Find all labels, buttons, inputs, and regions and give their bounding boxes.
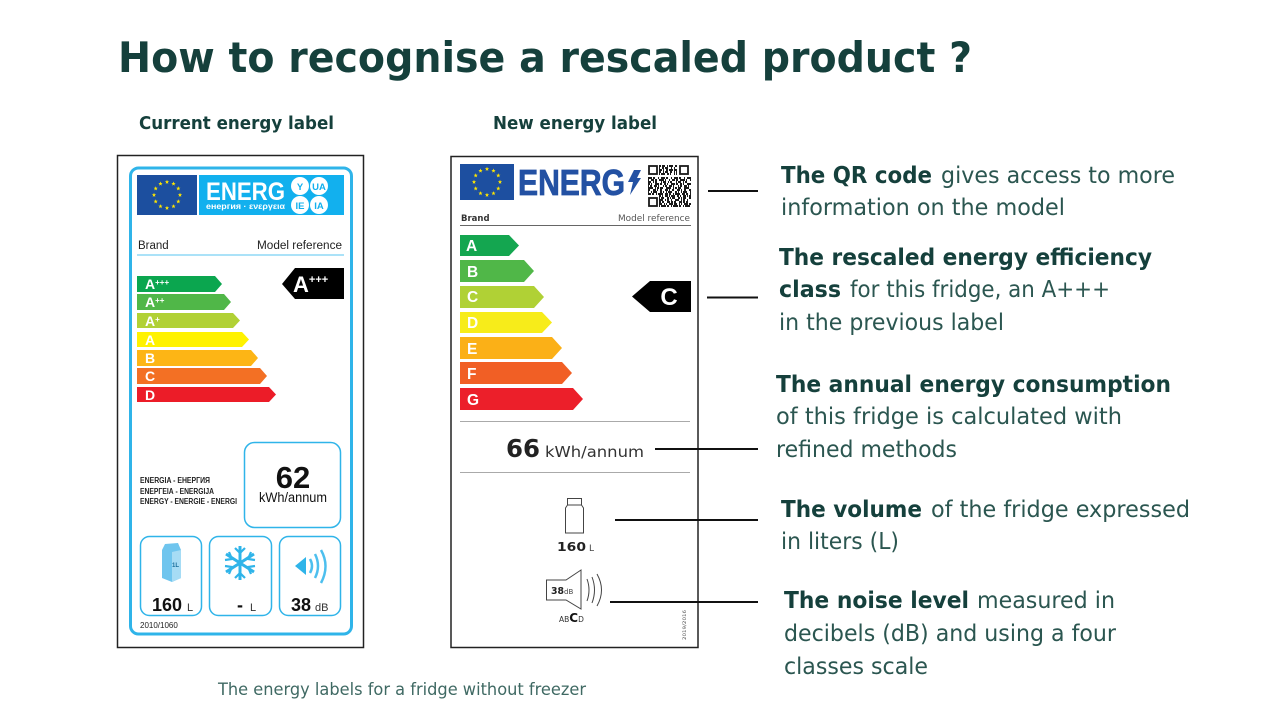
consumption box 62 kWh/annum: kWh/annum	[259, 490, 327, 505]
energy banner: IA	[314, 201, 324, 212]
efficiency scale A+++ to D: D	[145, 387, 155, 403]
freezer box: -	[237, 595, 243, 615]
icon: snowflake	[225, 546, 255, 580]
brand and model	[461, 214, 690, 224]
icon: speaker	[295, 550, 326, 583]
efficiency scale A to G: E	[467, 341, 477, 358]
icon: QR code	[648, 166, 691, 206]
multilingual energy text	[140, 476, 237, 506]
icon: milk carton: 1L	[172, 563, 179, 569]
brand and model: Brand	[138, 240, 169, 252]
callout: rescaled class: The rescaled energy efficiency	[779, 245, 1152, 271]
consumption 66 kWh/annum: kWh/annum	[545, 443, 644, 461]
noise box 38 dB: 38	[291, 595, 311, 615]
freezer box	[210, 536, 272, 616]
brand and model	[138, 240, 342, 252]
callout: rescaled class	[779, 245, 1152, 336]
regulation number: 2019/2016	[682, 610, 688, 640]
regulation number: 2010/1060	[140, 621, 178, 630]
callout: annual consumption: refined methods	[776, 437, 957, 463]
multilingual energy text: ENERGY - ENERGIE - ENERGI	[140, 497, 237, 506]
energy banner	[199, 175, 344, 215]
energy banner: Y	[297, 182, 304, 193]
caption: The energy labels for a fridge without freezer	[217, 680, 586, 700]
energy banner: енергия · ενεργεια	[206, 202, 285, 211]
icon: speaker noise 38 dB ABCD: 38	[551, 586, 564, 597]
callout: volume: The volume	[781, 497, 922, 523]
energy banner: IE	[296, 201, 304, 212]
consumption 66 kWh/annum	[506, 434, 644, 463]
icon: speaker noise 38 dB ABCD: dB	[564, 588, 573, 596]
icon: bottle volume 160 L: L	[589, 544, 594, 554]
heading: new energy label: New energy label	[493, 113, 657, 134]
volume box 160 L	[140, 536, 202, 616]
class marker A+++	[282, 268, 344, 299]
noise box 38 dB: dB	[315, 602, 328, 614]
brand and model: Model reference	[257, 240, 342, 252]
efficiency scale A+++ to D: ++	[155, 296, 165, 305]
efficiency scale A+++ to D: A	[145, 332, 155, 348]
callout: rescaled class: class	[779, 277, 841, 303]
efficiency scale A+++ to D: A	[145, 313, 155, 329]
class marker A+++: A	[293, 272, 309, 297]
consumption box 62 kWh/annum: 62	[276, 460, 310, 495]
multilingual energy text: ENERGIA - ЕНЕРГИЯ	[140, 476, 210, 485]
efficiency scale A to G: F	[467, 366, 476, 383]
callout: volume: of the fridge expressed	[931, 497, 1190, 523]
panel: current energy label	[118, 156, 364, 648]
callout: QR code	[781, 163, 1175, 221]
noise box 38 dB	[280, 536, 340, 616]
efficiency scale A+++ to D: B	[145, 350, 155, 366]
efficiency scale A to G	[460, 235, 583, 410]
volume box 160 L: 160	[152, 595, 182, 615]
class marker A+++: +++	[309, 274, 328, 286]
volume box 160 L: L	[187, 602, 193, 614]
class marker C	[632, 281, 691, 312]
brand and model: Model reference	[618, 214, 690, 224]
callout: QR code: The QR code	[781, 163, 932, 189]
callout: noise level: The noise level	[784, 588, 969, 614]
consumption 66 kWh/annum: 66	[506, 434, 540, 463]
consumption box 62 kWh/annum	[244, 442, 340, 528]
efficiency scale A+++ to D: +++	[155, 278, 169, 287]
efficiency scale A+++ to D	[137, 276, 276, 403]
energy banner: UA	[312, 182, 326, 193]
energy wordmark: ENERG	[518, 162, 625, 203]
icon: bottle volume 160 L: 160	[557, 540, 586, 554]
callout: noise level: decibels (dB) and using a four	[784, 621, 1117, 647]
efficiency scale A to G: A	[466, 238, 477, 255]
leader lines	[610, 191, 758, 602]
icon: speaker noise 38 dB ABCD	[546, 570, 602, 625]
title: How to recognise a rescaled product ?	[118, 33, 972, 82]
callout: annual consumption: of this fridge is calculated with	[776, 404, 1122, 430]
icon: EU flag	[460, 164, 514, 200]
efficiency scale A+++ to D: +	[155, 315, 160, 324]
callout: volume: in liters (L)	[781, 529, 899, 555]
brand and model: Brand	[461, 214, 490, 224]
callout: noise level: measured in	[977, 588, 1115, 614]
callout: QR code: gives access to more	[941, 163, 1175, 189]
efficiency scale A+++ to D: C	[145, 368, 155, 384]
callout: noise level	[784, 588, 1117, 680]
icon: bottle volume 160 L	[557, 498, 594, 554]
efficiency scale A+++ to D: A	[145, 294, 155, 310]
energy banner: ENERG	[206, 178, 285, 206]
icon: speaker noise 38 dB ABCD: ABCD	[559, 611, 584, 625]
multilingual energy text: ΕΝΕΡΓΕΙΑ - ENERGIJA	[140, 487, 214, 496]
efficiency scale A to G: D	[467, 315, 478, 332]
callout: rescaled class: for this fridge, an A+++	[850, 277, 1110, 303]
callout: annual consumption: The annual energy consumption	[776, 372, 1171, 398]
class marker C: C	[660, 284, 678, 311]
callout: volume	[781, 497, 1190, 555]
callout: annual consumption	[776, 372, 1171, 463]
callout: rescaled class: in the previous label	[779, 310, 1004, 336]
efficiency scale A to G: B	[467, 264, 478, 281]
efficiency scale A+++ to D: A	[145, 276, 155, 292]
icon: EU flag	[137, 175, 197, 215]
efficiency scale A to G: C	[467, 289, 478, 306]
callout: QR code: information on the model	[781, 195, 1065, 221]
efficiency scale A to G: G	[467, 392, 479, 409]
freezer box: L	[250, 602, 256, 614]
callout: noise level: classes scale	[784, 654, 928, 680]
panel: new energy label	[451, 156, 698, 648]
heading: current energy label: Current energy label	[139, 113, 334, 134]
